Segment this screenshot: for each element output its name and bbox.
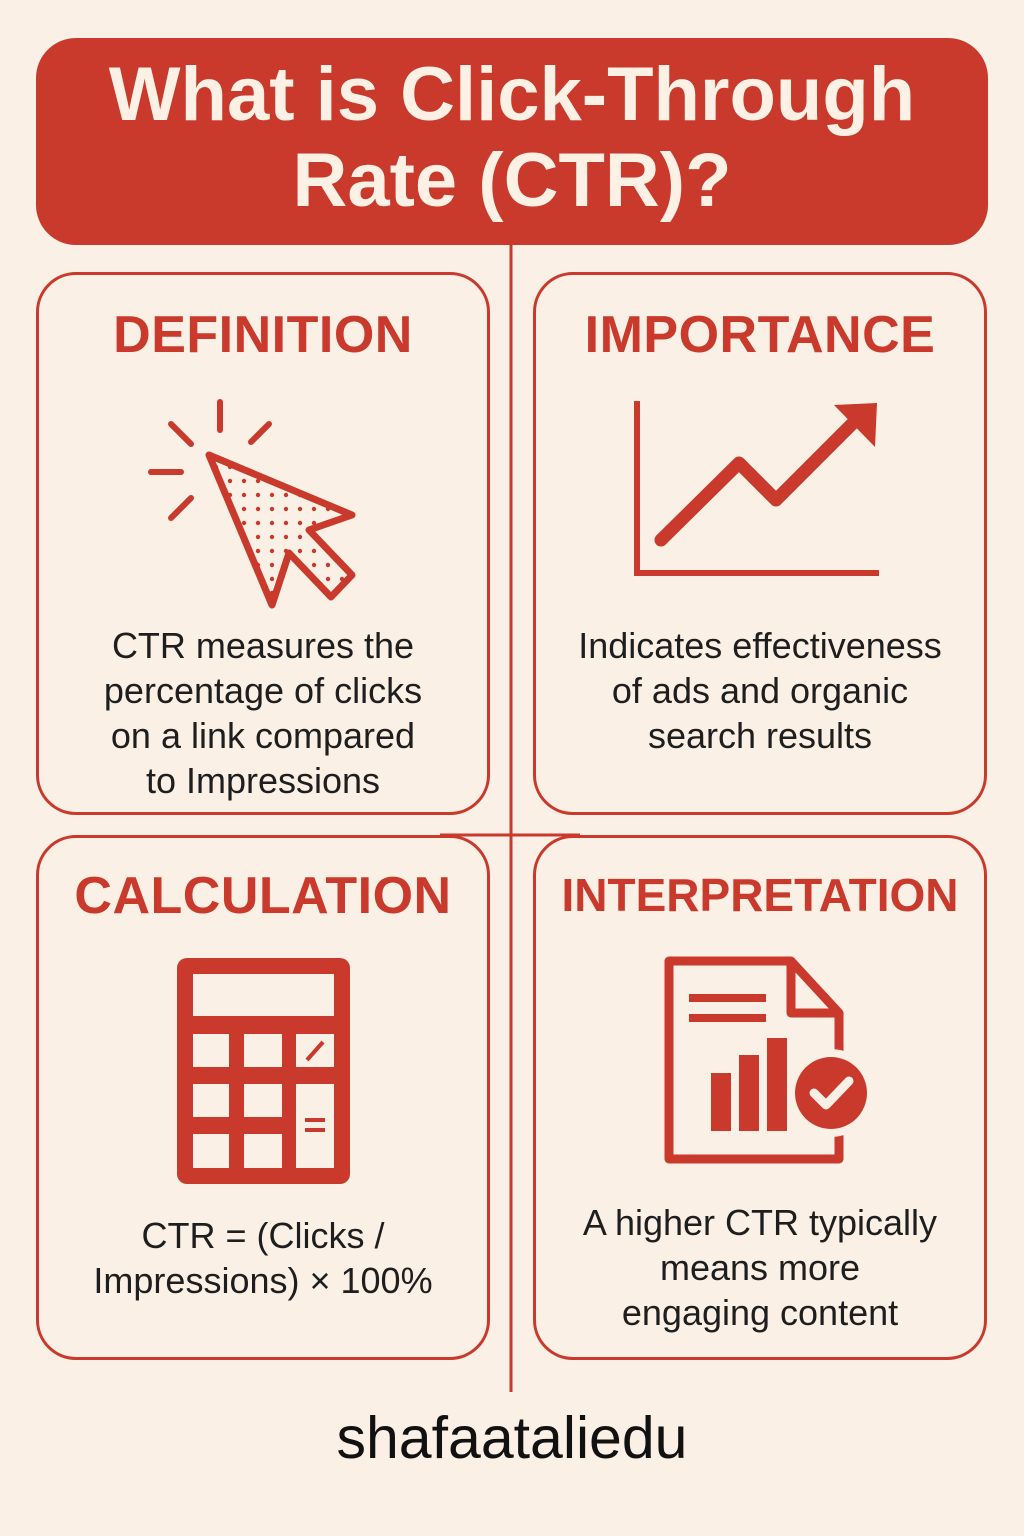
text: definition xyxy=(104,625,422,801)
text: importance: Indicates effectiveness xyxy=(578,625,942,666)
title: Rate (CTR)? xyxy=(292,138,732,223)
text: formula: CTR = (Clicks / xyxy=(142,1215,384,1256)
panel: interpretation xyxy=(533,835,987,1360)
text: importance: of ads and organic xyxy=(612,670,908,711)
panel: calculation xyxy=(36,835,490,1360)
panel: importance xyxy=(533,272,987,815)
text: definition: to Impressions xyxy=(146,760,380,801)
icon: report document xyxy=(664,956,867,1164)
text: definition: on a link compared xyxy=(111,715,415,756)
icon: cursor click xyxy=(148,399,356,608)
text: importance xyxy=(578,625,942,756)
text: definition: percentage of clicks xyxy=(104,670,422,711)
footer: shafaataliedu xyxy=(336,1405,688,1471)
text: formula xyxy=(93,1215,433,1301)
heading: importance: IMPORTANCE xyxy=(585,306,935,364)
text: formula: Impressions) × 100% xyxy=(93,1260,433,1301)
panel: definition xyxy=(36,272,490,815)
text: importance: search results xyxy=(648,715,872,756)
heading: definition: DEFINITION xyxy=(113,306,413,364)
icon: calculator xyxy=(177,958,350,1184)
text: definition: CTR measures the xyxy=(112,625,414,666)
text: interpretation: A higher CTR typically xyxy=(583,1202,937,1243)
heading: calculation: CALCULATION xyxy=(74,867,452,925)
text: interpretation: means more xyxy=(660,1247,860,1288)
icon: growth chart xyxy=(634,401,879,576)
text: interpretation: engaging content xyxy=(622,1292,898,1333)
title xyxy=(36,38,988,245)
text: interpretation xyxy=(583,1202,937,1333)
heading: interpretation: INTERPRETATION xyxy=(562,869,958,921)
title: What is Click-Through xyxy=(109,52,915,137)
